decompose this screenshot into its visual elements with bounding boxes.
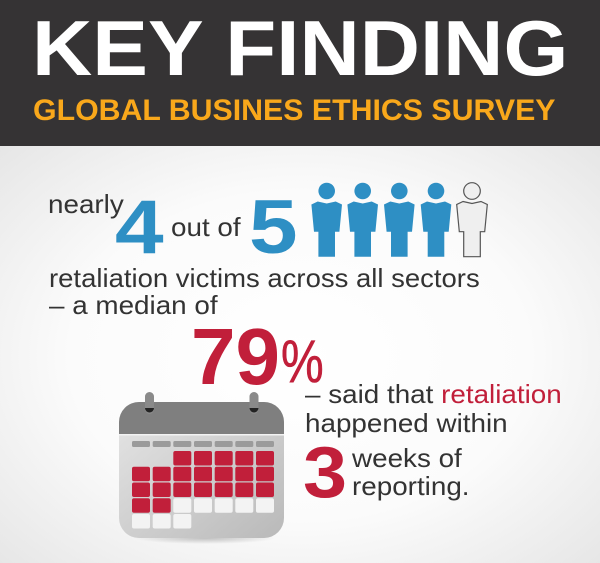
subtitle: GLOBAL BUSINES ETHICS SURVEY bbox=[33, 94, 555, 127]
number: 4: 4 bbox=[115, 185, 164, 270]
icon: person 3 bbox=[384, 183, 415, 257]
icon: person 1 bbox=[311, 183, 342, 257]
title: KEY FINDING bbox=[32, 4, 568, 92]
icon: person 5 outline bbox=[457, 183, 487, 257]
text: said that retaliation: – said that retaliation bbox=[305, 379, 562, 409]
header band bbox=[0, 0, 600, 146]
calendar rings bbox=[145, 392, 258, 414]
number: 79%: % bbox=[281, 328, 324, 395]
number: 3: 3 bbox=[303, 433, 347, 513]
text: out of: out of bbox=[171, 212, 241, 242]
text: a median of: – a median of bbox=[49, 290, 218, 320]
number: 5: 5 bbox=[249, 185, 298, 270]
icon: calendar bbox=[119, 392, 284, 543]
text: happened within: happened within bbox=[305, 408, 508, 438]
red day cells bbox=[132, 451, 274, 513]
text: weeks of: weeks of bbox=[352, 443, 462, 473]
text: reporting: reporting. bbox=[352, 471, 470, 501]
weekday markers bbox=[132, 441, 274, 447]
icon: person 4 bbox=[421, 183, 451, 257]
number: 79%: 79 bbox=[191, 312, 280, 401]
number: 79% bbox=[191, 312, 324, 401]
text: retaliation victims: retaliation victims across all sectors bbox=[49, 263, 480, 293]
white day cells bbox=[132, 498, 274, 528]
icon: person 2 bbox=[347, 183, 378, 257]
page background bbox=[0, 146, 600, 563]
text: nearly: nearly bbox=[48, 189, 124, 219]
icon: row of five people, four filled bbox=[311, 182, 488, 258]
